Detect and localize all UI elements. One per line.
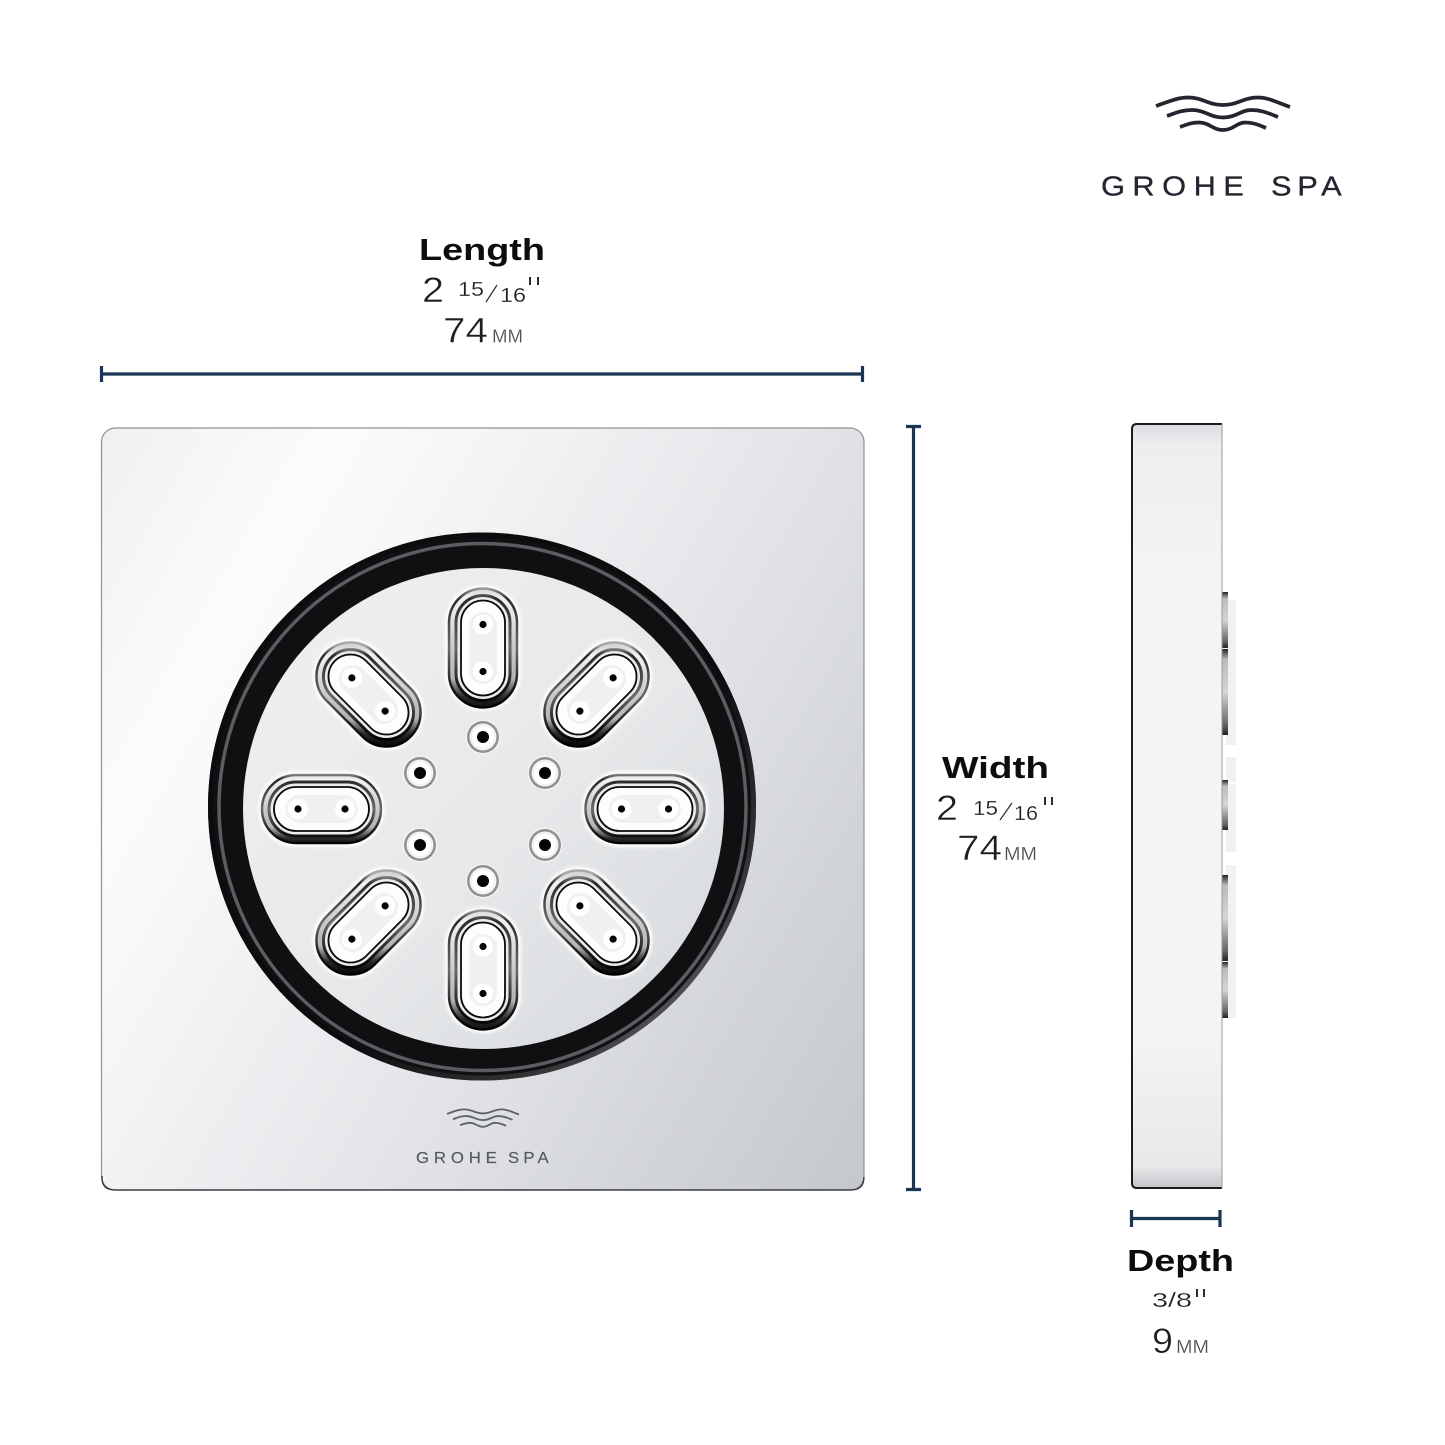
brand name: GROHE: [1101, 171, 1251, 202]
panel: front view of shower head: [102, 428, 864, 1190]
panel: side view: [1132, 423, 1236, 1189]
depth label: MM: [1176, 1337, 1209, 1357]
length dimension arrow: [100, 366, 864, 382]
nozzle: upper right: [525, 623, 668, 766]
depth label: Depth: [1127, 1243, 1234, 1278]
nozzle: upper left: [297, 623, 440, 766]
black ring: [208, 532, 756, 1080]
width label: Width: [942, 750, 1049, 785]
width label: 74: [957, 829, 1002, 868]
plate logo: [416, 1109, 553, 1167]
nozzle: lower right: [525, 851, 668, 994]
plate logo: SPA: [508, 1149, 553, 1167]
length label: 2: [422, 271, 444, 310]
depth label: [1127, 1243, 1234, 1361]
side body: [1132, 423, 1222, 1189]
brand name: SPA: [1271, 171, 1347, 202]
depth label: 3/8: [1152, 1290, 1192, 1312]
width label: 2: [936, 789, 958, 828]
width label: MM: [1004, 844, 1037, 864]
width label: 16: [1014, 803, 1038, 825]
logo: GROHE SPA: [1101, 98, 1347, 202]
nozzle: top: [445, 585, 521, 711]
length label: 16: [500, 285, 526, 307]
spray disc: [243, 568, 724, 1049]
length label: Length: [419, 232, 545, 267]
length label: MM: [492, 326, 523, 346]
width label: 15: [973, 798, 998, 820]
side nozzle profile: [1222, 592, 1236, 1018]
depth dimension arrow: [1131, 1210, 1221, 1227]
depth label: 9: [1152, 1322, 1173, 1361]
square plate: [102, 428, 864, 1190]
nozzle: left: [258, 771, 384, 847]
nozzle: lower left: [297, 851, 440, 994]
nozzle: bottom: [445, 907, 521, 1033]
length label: 74: [443, 312, 488, 350]
length label: 15: [458, 279, 484, 301]
length label: [419, 232, 545, 350]
width dimension arrow: [906, 425, 921, 1191]
width label: [936, 750, 1052, 868]
center jets: [403, 720, 562, 898]
icon: waves: [1156, 98, 1290, 130]
nozzle: right: [582, 771, 708, 847]
plate logo: GROHE: [416, 1149, 502, 1167]
